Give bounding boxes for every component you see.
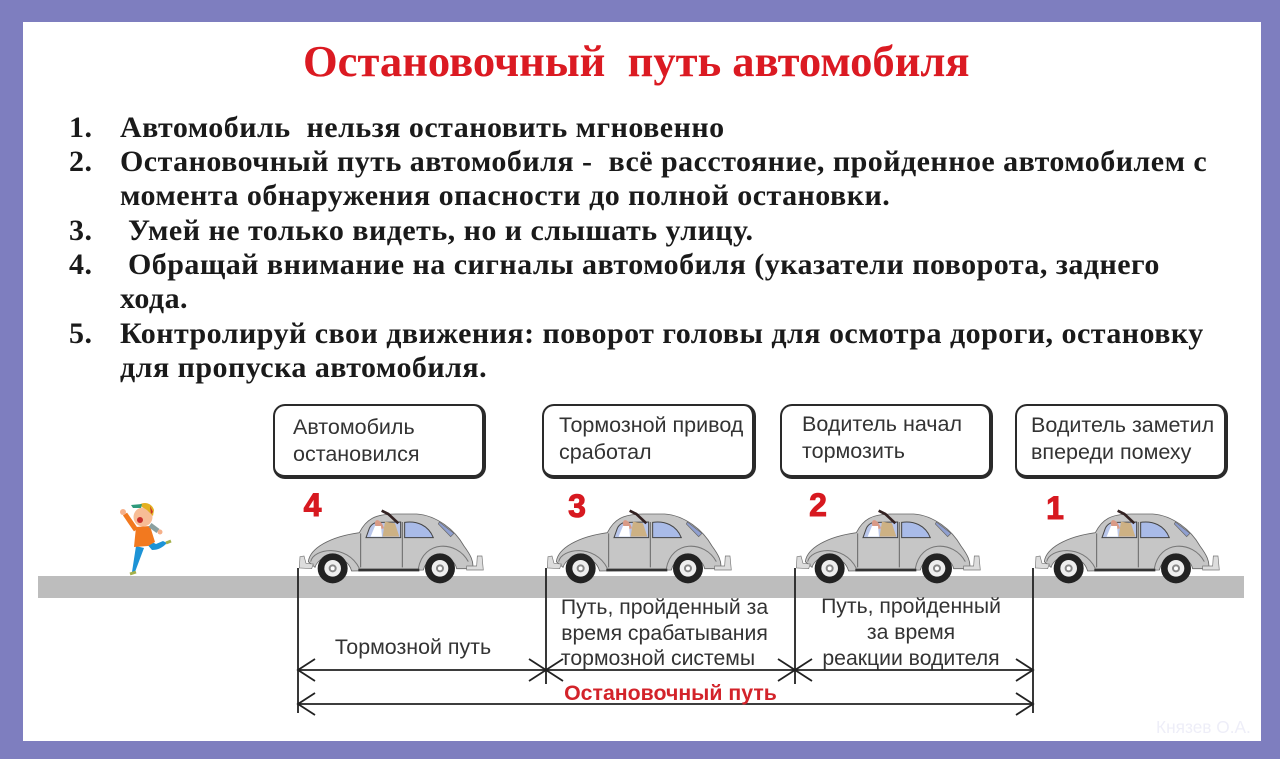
callout: driver noticed obstacle	[1015, 404, 1228, 479]
text block: numbered rules	[69, 111, 1207, 384]
number 2: 2	[809, 487, 827, 523]
label: brake system distance: Путь, пройденный за	[561, 596, 768, 619]
callout: car stopped	[273, 404, 486, 479]
icon: running child	[120, 503, 171, 574]
road	[38, 576, 1244, 598]
label: reaction distance: реакции водителя	[822, 647, 1000, 670]
label: braking distance: Тормозной путь	[335, 635, 491, 659]
rule 4: 4.	[69, 248, 92, 281]
rule 2 text: Остановочный путь автомобиля - всё расстояние, пройденное автомобилем с момента обнаружения опасности до полной остановки.	[120, 145, 1207, 212]
title: Остановочный путь автомобиля	[303, 36, 970, 86]
rule 1 text: Автомобиль нельзя остановить мгновенно	[120, 111, 725, 144]
rule 5 text: Контролируй свои движения: поворот головы для осмотра дороги, остановку для пропуска автомобиля.	[120, 317, 1204, 384]
callout: driver started braking: Водитель начал тормозить	[802, 412, 962, 463]
callout: brake actuated: Тормозной привод сработал	[559, 413, 743, 464]
callout: car stopped: Автомобиль остановился	[293, 415, 419, 466]
rule 4 text: Обращай внимание на сигналы автомобиля (указатели поворота, заднего	[128, 248, 1160, 281]
number 3: 3	[568, 488, 586, 524]
car 2	[796, 511, 980, 583]
rule 1: 1.	[69, 111, 92, 144]
dimension lines	[298, 568, 1033, 715]
callout: brake actuated	[542, 404, 756, 479]
label: reaction distance	[821, 595, 1001, 670]
label: brake system distance: тормозной системы	[561, 647, 755, 670]
label: reaction distance: за время	[867, 621, 955, 644]
car 1	[1035, 511, 1219, 583]
rule 2: 2.	[69, 145, 92, 178]
rule 3 text: Умей не только видеть, но и слышать улицу.	[128, 214, 753, 247]
label: stopping distance: Остановочный путь	[564, 681, 777, 705]
car 3	[547, 511, 731, 583]
label: brake system distance: время срабатывания	[561, 622, 768, 645]
callout: driver noticed obstacle: Водитель заметил впереди помеху	[1031, 413, 1214, 464]
car 4	[299, 511, 483, 583]
rule 3: 3.	[69, 214, 92, 247]
rule 5: 5.	[69, 317, 92, 350]
callout: driver started braking	[780, 404, 993, 479]
rule 4 text: хода.	[120, 282, 188, 315]
rule 4 text	[120, 248, 1160, 315]
number 4: 4	[304, 487, 322, 523]
label: reaction distance: Путь, пройденный	[821, 595, 1001, 618]
label: brake system distance	[561, 596, 768, 670]
number 1: 1	[1046, 490, 1064, 526]
watermark: Князев О.А.	[1156, 717, 1251, 737]
